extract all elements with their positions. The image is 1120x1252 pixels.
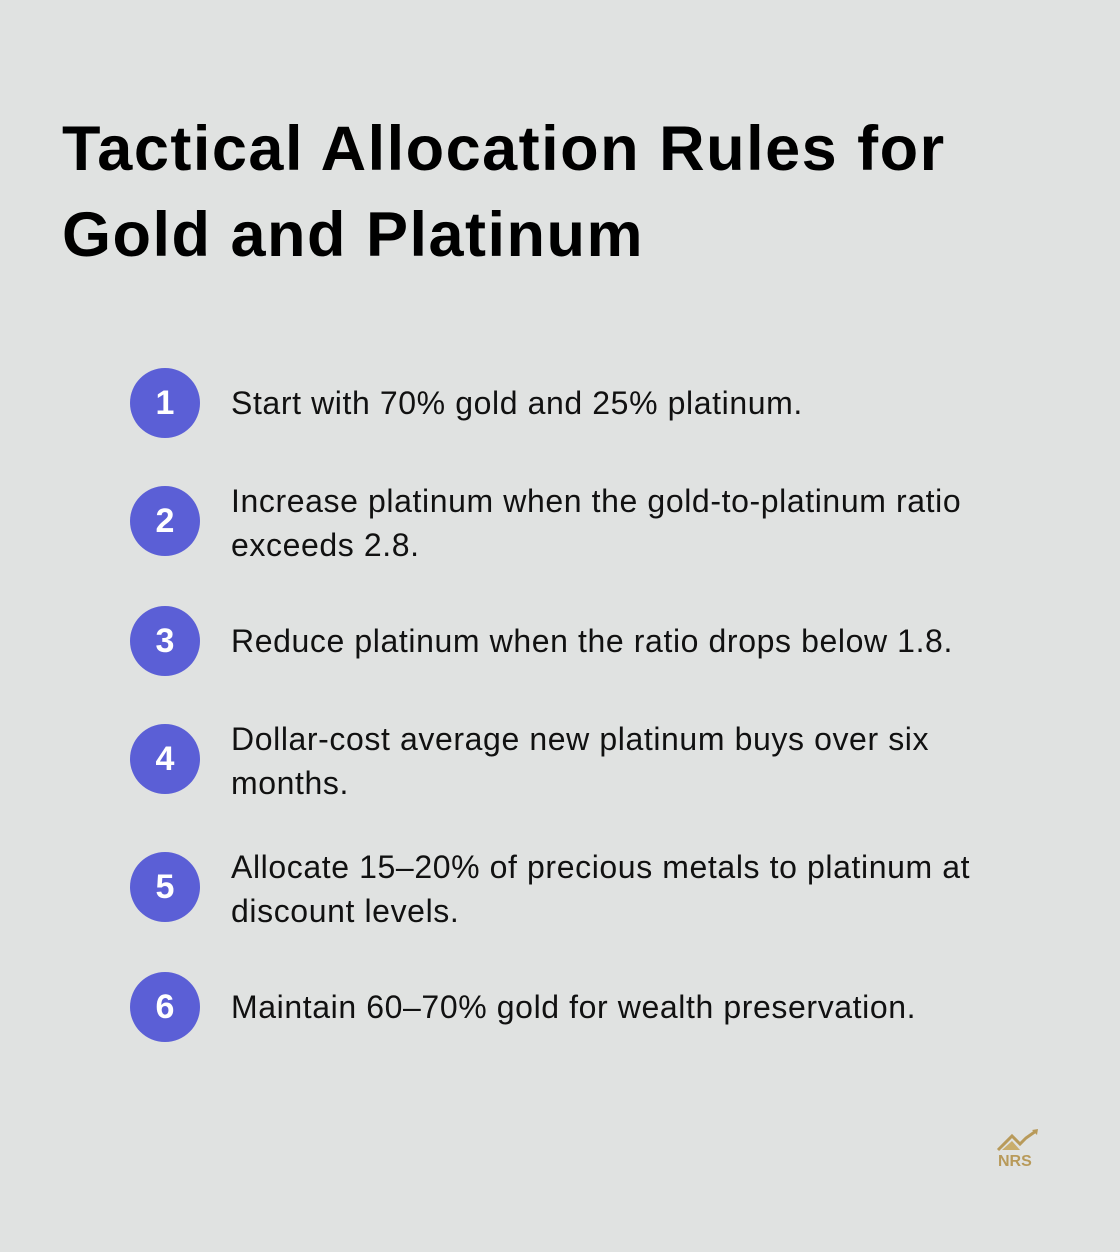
title <box>62 114 946 270</box>
title: Tactical Allocation Rules for <box>62 114 946 184</box>
item 2: Increase platinum when the gold-to-platinum ratio exceeds 2.8. <box>231 483 961 563</box>
item 1: 1 <box>156 384 174 422</box>
item 2: 2 <box>156 502 174 540</box>
item 3: 3 <box>156 622 174 660</box>
item 1 <box>130 368 803 438</box>
title: Gold and Platinum <box>62 200 644 270</box>
item 5: Allocate 15–20% of precious metals to platinum at discount levels. <box>231 849 970 929</box>
item 6: Maintain 60–70% gold for wealth preservation. <box>231 989 916 1025</box>
item 3 <box>130 606 953 676</box>
logo <box>997 1129 1038 1170</box>
item 6 <box>130 972 916 1042</box>
item 4: Dollar-cost average new platinum buys over six months. <box>231 721 929 801</box>
logo: NRS <box>998 1153 1032 1170</box>
item 1: Start with 70% gold and 25% platinum. <box>231 385 803 421</box>
item 6: 6 <box>156 988 174 1026</box>
item 3: Reduce platinum when the ratio drops below 1.8. <box>231 623 953 659</box>
item 4: 4 <box>156 740 174 778</box>
item 5: 5 <box>156 868 174 906</box>
